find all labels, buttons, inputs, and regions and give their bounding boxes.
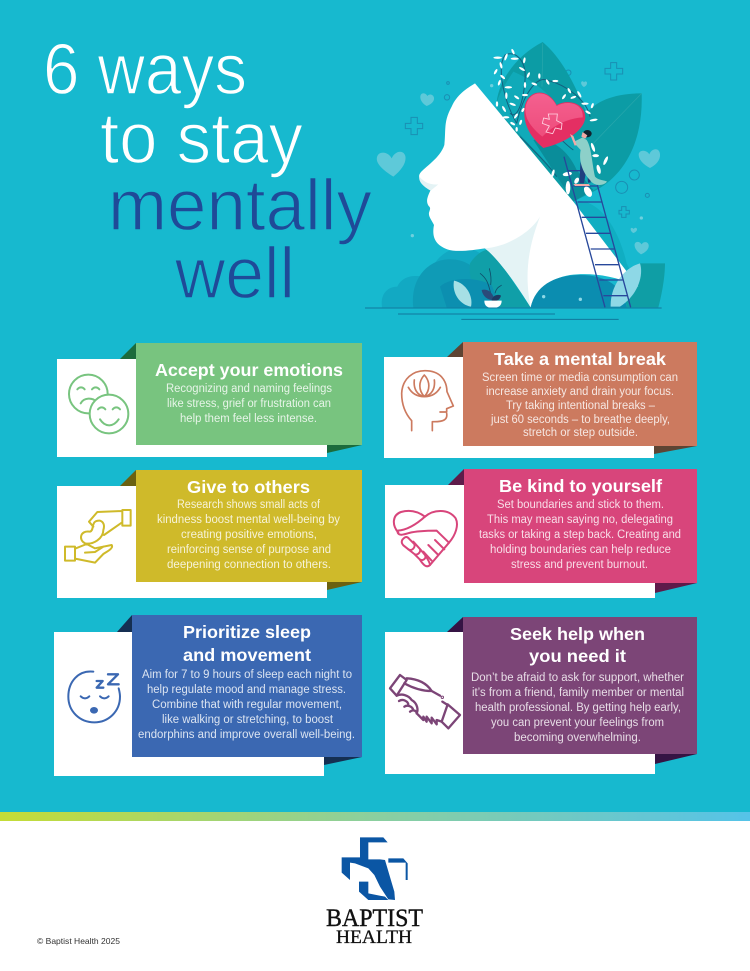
panel text: Take a mental break (494, 349, 666, 369)
panel text: and movement (183, 645, 311, 665)
icon: happy and sad faces (69, 375, 128, 433)
card backing (57, 343, 362, 457)
panel text (136, 470, 362, 582)
panel text: you need it (529, 646, 626, 666)
panel text: health professional. By getting help early, (475, 702, 681, 714)
panel text: kindness boost mental well-being by (157, 514, 340, 526)
panel text: Don’t be afraid to ask for support, whether (471, 672, 684, 684)
panel text: Seek help when (510, 624, 645, 644)
white head silhouette (419, 83, 638, 307)
ground lines (365, 308, 662, 319)
floating hearts and plus signs (377, 63, 660, 254)
panel text: reinforcing sense of purpose and (167, 544, 331, 556)
panel text: tasks or taking a step back. Creating and (479, 529, 681, 541)
copyright: © Baptist Health 2025 (37, 936, 120, 946)
panel text: holding boundaries can help reduce (490, 544, 671, 556)
panel text: Try taking intentional breaks – (506, 400, 656, 412)
person on ladder (570, 130, 607, 186)
logo: Baptist Health: HEALTH (336, 927, 412, 948)
vines with white leaves (493, 48, 609, 198)
card: Accept your emotions (57, 343, 362, 457)
panel text: Combine that with regular movement, (152, 699, 342, 711)
footer (0, 812, 750, 971)
icon: head with lotus (402, 371, 453, 431)
logo: Baptist Health (326, 837, 423, 948)
panel text: This may mean saying no, delegating (487, 514, 673, 526)
illustration: head with heart and ladder (365, 42, 665, 319)
title (43, 30, 372, 314)
panel text: creating positive emotions, (181, 529, 317, 541)
panel text: becoming overwhelming. (514, 732, 641, 744)
potted plant (480, 268, 502, 308)
panel text (463, 617, 697, 754)
bottom foliage (382, 248, 665, 307)
panel text: it’s from a friend, family member or mental (472, 687, 684, 699)
card: Seek help when you need it (385, 617, 697, 774)
panel text: Prioritize sleep (183, 622, 311, 642)
panel text: stretch or step outside. (523, 427, 638, 439)
neck and nose shading (419, 177, 540, 307)
panel text: Screen time or media consumption can (482, 372, 678, 384)
card: Take a mental break (384, 342, 697, 458)
panel text: like walking or stretching, to boost (162, 714, 334, 726)
panel text: Set boundaries and stick to them. (497, 499, 664, 511)
panel text: Give to others (187, 477, 310, 497)
heart with bandage (524, 92, 585, 148)
panel text: Aim for 7 to 9 hours of sleep each night to (142, 669, 352, 681)
title: mentally (108, 166, 372, 246)
logo: Baptist Health: BAPTIST (326, 905, 423, 932)
panel text: increase anxiety and drain your focus. (486, 386, 674, 398)
panel text (132, 615, 362, 757)
panel text (464, 469, 697, 583)
card backing (57, 470, 362, 598)
card backing (54, 615, 362, 776)
panel text: Research shows small acts of (177, 499, 321, 511)
title: well (174, 234, 295, 314)
panel text: like stress, grief or frustration can (167, 398, 331, 410)
card: Be kind to yourself (385, 469, 697, 598)
back leaves (496, 42, 642, 287)
icon: giving hands (65, 510, 131, 563)
icon: clasped hands (390, 675, 460, 728)
panel text: help them feel less intense. (180, 413, 317, 425)
panel text (136, 343, 362, 445)
panel text: you can prevent your feelings from (491, 717, 664, 729)
panel text (463, 342, 697, 446)
title: to stay (100, 99, 303, 179)
panel text: endorphins and improve overall well-being. (138, 729, 355, 741)
panel text: Recognizing and naming feelings (166, 383, 332, 395)
panel text: Accept your emotions (155, 360, 343, 380)
ladder (564, 157, 631, 307)
bottom leaves over the head (531, 263, 641, 307)
title: 6 ways (43, 30, 247, 110)
card backing (384, 342, 697, 458)
card: Give to others (57, 470, 362, 598)
panel text: stress and prevent burnout. (511, 559, 648, 571)
panel text: deepening connection to others. (167, 559, 331, 571)
card: Prioritize sleep and movement (54, 615, 362, 776)
card backing (385, 617, 697, 774)
panel text: just 60 seconds – to breathe deeply, (490, 414, 670, 426)
icon: sleeping face (68, 672, 120, 722)
card backing (385, 469, 697, 598)
panel text: Be kind to yourself (499, 476, 662, 496)
panel text: help regulate mood and manage stress. (147, 684, 346, 696)
icon: heart handshake (394, 511, 457, 566)
